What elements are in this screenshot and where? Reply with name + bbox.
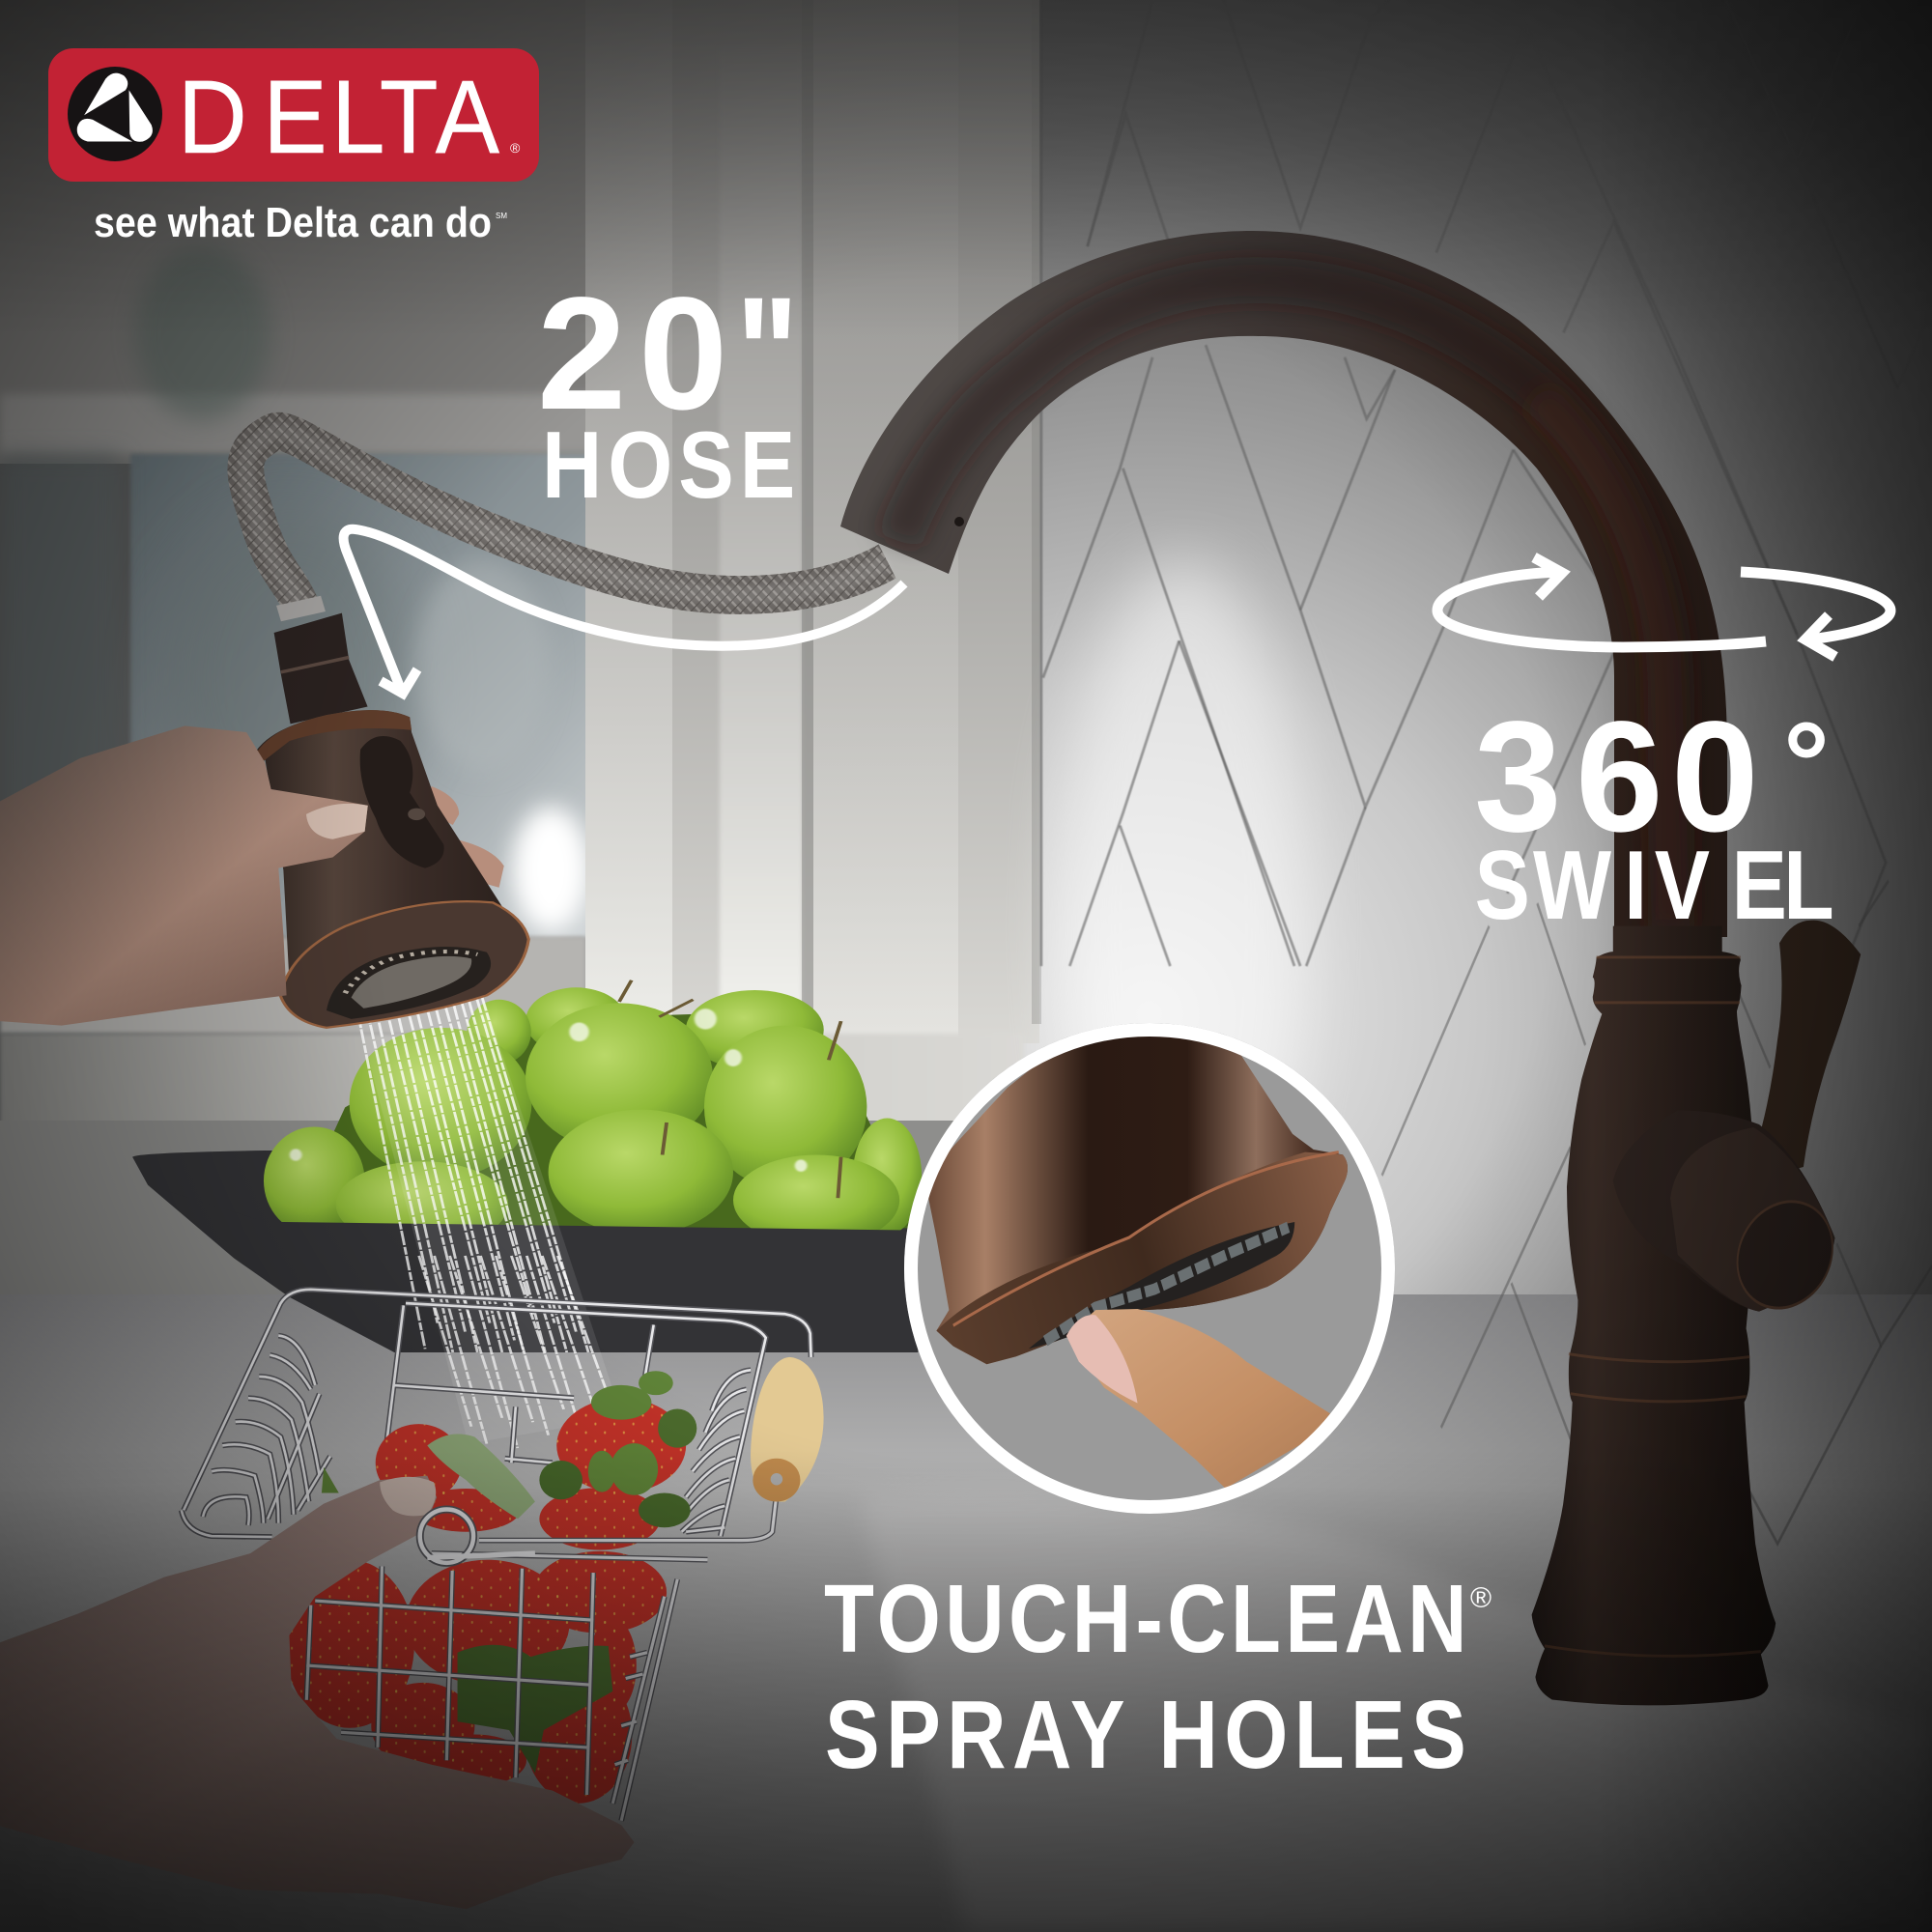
heading: 360 degree swivel <box>1474 688 1834 940</box>
arrow: hose length <box>344 529 904 694</box>
window glass <box>130 454 589 937</box>
window sill <box>0 937 585 1034</box>
spray rim <box>280 901 528 1028</box>
basket clip ring <box>420 1509 535 1563</box>
strawberries <box>285 1398 686 1804</box>
arrow: 360 degree swivel <box>1437 557 1890 657</box>
tagline: SM <box>496 212 507 220</box>
fingernail <box>306 804 368 839</box>
Delta logo badge <box>48 48 539 182</box>
heading: 20 inch hose: 20 <box>537 265 727 443</box>
white window trim and panelling <box>585 0 1039 1043</box>
heading: 20 inch hose: HOSE <box>542 412 795 518</box>
wordmark: DELTA <box>178 58 499 175</box>
strawberry leaves <box>322 1371 696 1774</box>
heading: 20 inch hose <box>537 265 799 518</box>
heading: Touch-Clean spray holes: ® <box>1470 1582 1492 1614</box>
wooden handle <box>751 1357 824 1502</box>
heading: 20 inch hose: " <box>736 265 799 443</box>
heading: Touch-Clean spray holes <box>824 1564 1492 1789</box>
thumbnail <box>380 1477 436 1516</box>
black collar <box>274 613 368 724</box>
water spray <box>355 970 622 1448</box>
hub <box>1613 1110 1834 1312</box>
inset circle: finger cleaning spray holes <box>904 1023 1395 1514</box>
heading: 360 degree swivel: ° <box>1783 698 1830 828</box>
heading: 360 degree swivel: SWIVEL <box>1475 830 1834 940</box>
upper hand holding spray head <box>0 725 368 1026</box>
spray head close-up <box>928 1031 1348 1364</box>
heading: Touch-Clean spray holes: TOUCH-CLEAN <box>824 1564 1467 1673</box>
countertop <box>0 1294 1932 1932</box>
backsplash <box>0 1121 1024 1299</box>
finger <box>1066 1309 1330 1489</box>
hand behind spray head: fingertips <box>431 786 504 888</box>
left wall above window <box>0 0 599 464</box>
basket front wires <box>306 1476 779 1821</box>
holding hand <box>0 1476 635 1909</box>
pull-down hose <box>245 432 888 724</box>
basket back wires <box>182 1290 811 1537</box>
slider button <box>360 736 444 868</box>
spray holes <box>1029 1222 1294 1349</box>
dark bowl back <box>132 1151 918 1236</box>
lever <box>1755 921 1861 1171</box>
heading: Touch-Clean spray holes: SPRAY HOLES <box>825 1680 1466 1789</box>
logo emblem <box>68 67 162 161</box>
faucet body and lever handle <box>1532 921 1861 1705</box>
tile grout lines <box>1041 0 1932 966</box>
dark bowl front <box>148 1185 918 1352</box>
faucet spout gooseneck <box>840 231 1727 937</box>
heading: 360 degree swivel: 360 <box>1474 688 1759 865</box>
strawberries in wire basket held by hand <box>0 1290 824 1909</box>
bowl of green apples <box>132 980 922 1352</box>
tagline: see what Delta can do <box>94 199 492 246</box>
registered mark: ® <box>510 140 521 156</box>
spray head <box>256 710 528 1028</box>
metal ferrule <box>276 596 326 621</box>
